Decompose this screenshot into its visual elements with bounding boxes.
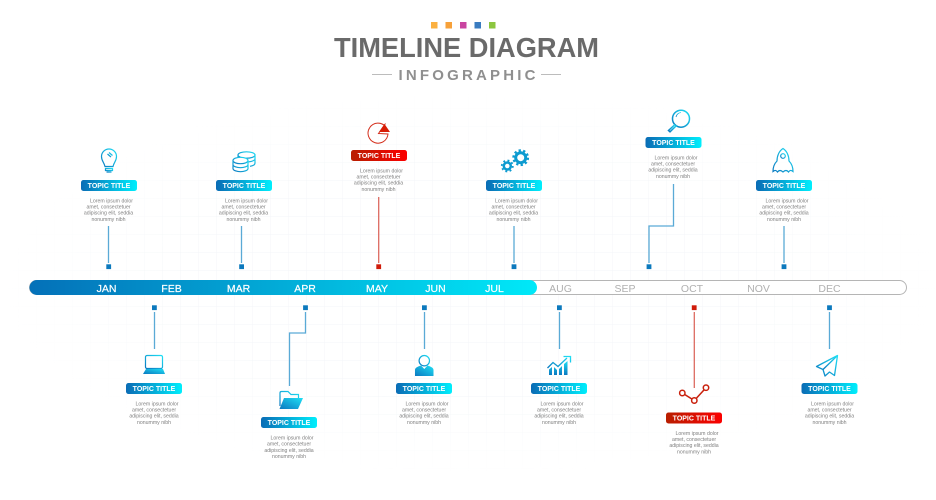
description: amet, consectetuer — [267, 442, 311, 448]
connector — [424, 312, 426, 349]
timeline bar — [30, 280, 906, 295]
timeline bar: NOV — [747, 283, 770, 295]
connector — [513, 226, 515, 263]
card: November rocket — [756, 148, 812, 269]
description: Lorem ipsum dolor — [655, 156, 698, 162]
description: adipiscing elit, seddia — [219, 211, 268, 217]
marker — [512, 264, 516, 269]
card: March coins — [216, 152, 272, 269]
connector — [558, 312, 560, 349]
connector — [783, 226, 785, 263]
timeline bar: SEP — [614, 283, 636, 295]
description: nonummy nibh — [226, 217, 261, 223]
description: amet, consectetuer — [356, 174, 401, 180]
colour squares — [431, 22, 496, 28]
card: October network — [666, 305, 722, 455]
description: adipiscing elit, seddia — [759, 211, 809, 217]
title: TIMELINE DIAGRAM — [334, 32, 599, 63]
description: amet, consectetuer — [807, 408, 852, 414]
description: adipiscing elit, seddia — [669, 443, 719, 449]
description — [129, 402, 179, 426]
description: Lorem ipsum dolor — [360, 168, 403, 174]
icon: magnifier — [668, 110, 690, 132]
description: nonummy nibh — [542, 420, 576, 426]
description: adipiscing elit, seddia — [805, 414, 854, 420]
timeline bar: FEB — [161, 283, 182, 295]
description: adipiscing elit, seddia — [399, 414, 449, 420]
badge: TOPIC TITLE — [88, 183, 131, 190]
description — [489, 198, 538, 223]
description — [648, 156, 698, 180]
description: amet, consectetuer — [491, 204, 536, 210]
card: February laptop — [126, 305, 182, 426]
connector — [828, 312, 830, 349]
marker — [557, 305, 562, 310]
description: nonummy nibh — [272, 454, 306, 460]
card: January idea — [81, 149, 137, 269]
badge: TOPIC TITLE — [223, 183, 266, 190]
description — [534, 402, 584, 426]
icon: connected nodes — [680, 385, 709, 403]
description: Lorem ipsum dolor — [136, 402, 179, 408]
description: Lorem ipsum dolor — [541, 402, 584, 408]
description: nonummy nibh — [656, 174, 690, 180]
timeline bar: DEC — [818, 283, 841, 295]
description: amet, consectetuer — [537, 408, 581, 414]
description: amet, consectetuer — [221, 204, 266, 210]
icon: pie chart — [368, 123, 390, 143]
icon: rocket — [773, 148, 793, 172]
description: adipiscing elit, seddia — [534, 414, 584, 420]
icon: light bulb — [102, 149, 116, 172]
timeline bar: JAN — [97, 283, 116, 295]
card: April folder — [261, 305, 317, 460]
badge — [646, 137, 702, 148]
marker — [827, 305, 832, 310]
card: December paper plane — [802, 305, 858, 426]
description: adipiscing elit, seddia — [264, 448, 314, 454]
marker — [422, 305, 427, 310]
description: nonummy nibh — [407, 420, 441, 426]
timeline bar: AUG — [549, 283, 572, 295]
badge: TOPIC TITLE — [403, 386, 446, 393]
icon: coins — [233, 152, 255, 172]
description — [805, 402, 854, 426]
description: nonummy nibh — [137, 420, 171, 426]
badge: TOPIC TITLE — [268, 420, 311, 427]
card: September search — [646, 110, 702, 269]
timeline bar: OCT — [681, 283, 704, 295]
icon: gears — [502, 150, 528, 172]
description: nonummy nibh — [767, 217, 801, 223]
description: nonummy nibh — [496, 217, 531, 223]
timeline bar: JUN — [425, 283, 446, 295]
timeline bar: MAY — [366, 283, 388, 295]
badge — [351, 150, 407, 161]
card: May pie chart — [351, 123, 407, 269]
description: adipiscing elit, seddia — [354, 181, 403, 187]
description: adipiscing elit, seddia — [648, 168, 698, 174]
subtitle: INFOGRAPHIC — [398, 67, 536, 84]
description: nonummy nibh — [677, 449, 711, 455]
marker — [303, 305, 308, 310]
marker — [239, 264, 244, 269]
icon: paper plane — [816, 356, 838, 376]
description: adipiscing elit, seddia — [129, 414, 179, 420]
description — [354, 168, 403, 193]
badge — [261, 417, 317, 428]
description — [399, 402, 449, 426]
description: amet, consectetuer — [651, 162, 695, 168]
connector — [108, 226, 110, 263]
description: amet, consectetuer — [132, 408, 176, 414]
connector — [240, 226, 242, 263]
description: amet, consectetuer — [762, 204, 806, 210]
description: amet, consectetuer — [86, 204, 131, 210]
icon: laptop — [143, 356, 165, 374]
badge: TOPIC TITLE — [763, 183, 806, 190]
timeline bar: JUL — [485, 283, 504, 295]
marker — [106, 264, 111, 269]
badge — [666, 412, 722, 424]
badge: TOPIC TITLE — [808, 386, 851, 393]
description: Lorem ipsum dolor — [225, 198, 268, 204]
description: nonummy nibh — [91, 217, 126, 223]
description: Lorem ipsum dolor — [90, 198, 133, 204]
marker — [152, 305, 157, 310]
description: adipiscing elit, seddia — [489, 211, 538, 217]
marker — [782, 264, 786, 269]
icon: person — [415, 356, 434, 376]
badge: TOPIC TITLE — [493, 183, 536, 190]
connector — [378, 197, 380, 263]
card: June person — [396, 305, 452, 426]
connector — [154, 312, 156, 349]
description: Lorem ipsum dolor — [406, 402, 449, 408]
description — [759, 198, 809, 223]
badge: TOPIC TITLE — [538, 386, 581, 393]
timeline bar: APR — [294, 283, 316, 295]
icon: folder — [280, 392, 303, 409]
description — [219, 198, 268, 223]
description: Lorem ipsum dolor — [676, 431, 719, 437]
description — [669, 431, 719, 455]
description — [84, 198, 133, 223]
badge: TOPIC TITLE — [358, 153, 401, 160]
connector — [290, 312, 306, 386]
description: amet, consectetuer — [672, 437, 716, 443]
badge: TOPIC TITLE — [673, 416, 716, 422]
description: nonummy nibh — [812, 420, 847, 426]
marker — [376, 264, 381, 269]
description: Lorem ipsum dolor — [271, 436, 314, 442]
connector — [649, 184, 674, 263]
icon: growth chart — [548, 356, 570, 375]
description: Lorem ipsum dolor — [495, 198, 538, 204]
marker — [692, 305, 697, 310]
connector — [693, 312, 695, 388]
card: August growth chart — [531, 305, 587, 426]
badge: TOPIC TITLE — [133, 386, 176, 393]
description: adipiscing elit, seddia — [84, 211, 133, 217]
description: Lorem ipsum dolor — [766, 198, 809, 204]
description — [264, 436, 314, 460]
description: nonummy nibh — [361, 187, 396, 193]
badge: TOPIC TITLE — [652, 140, 695, 147]
description: amet, consectetuer — [402, 408, 446, 414]
marker — [647, 264, 651, 269]
card: July gears — [486, 150, 542, 269]
timeline bar: MAR — [227, 283, 251, 295]
description: Lorem ipsum dolor — [811, 402, 854, 408]
